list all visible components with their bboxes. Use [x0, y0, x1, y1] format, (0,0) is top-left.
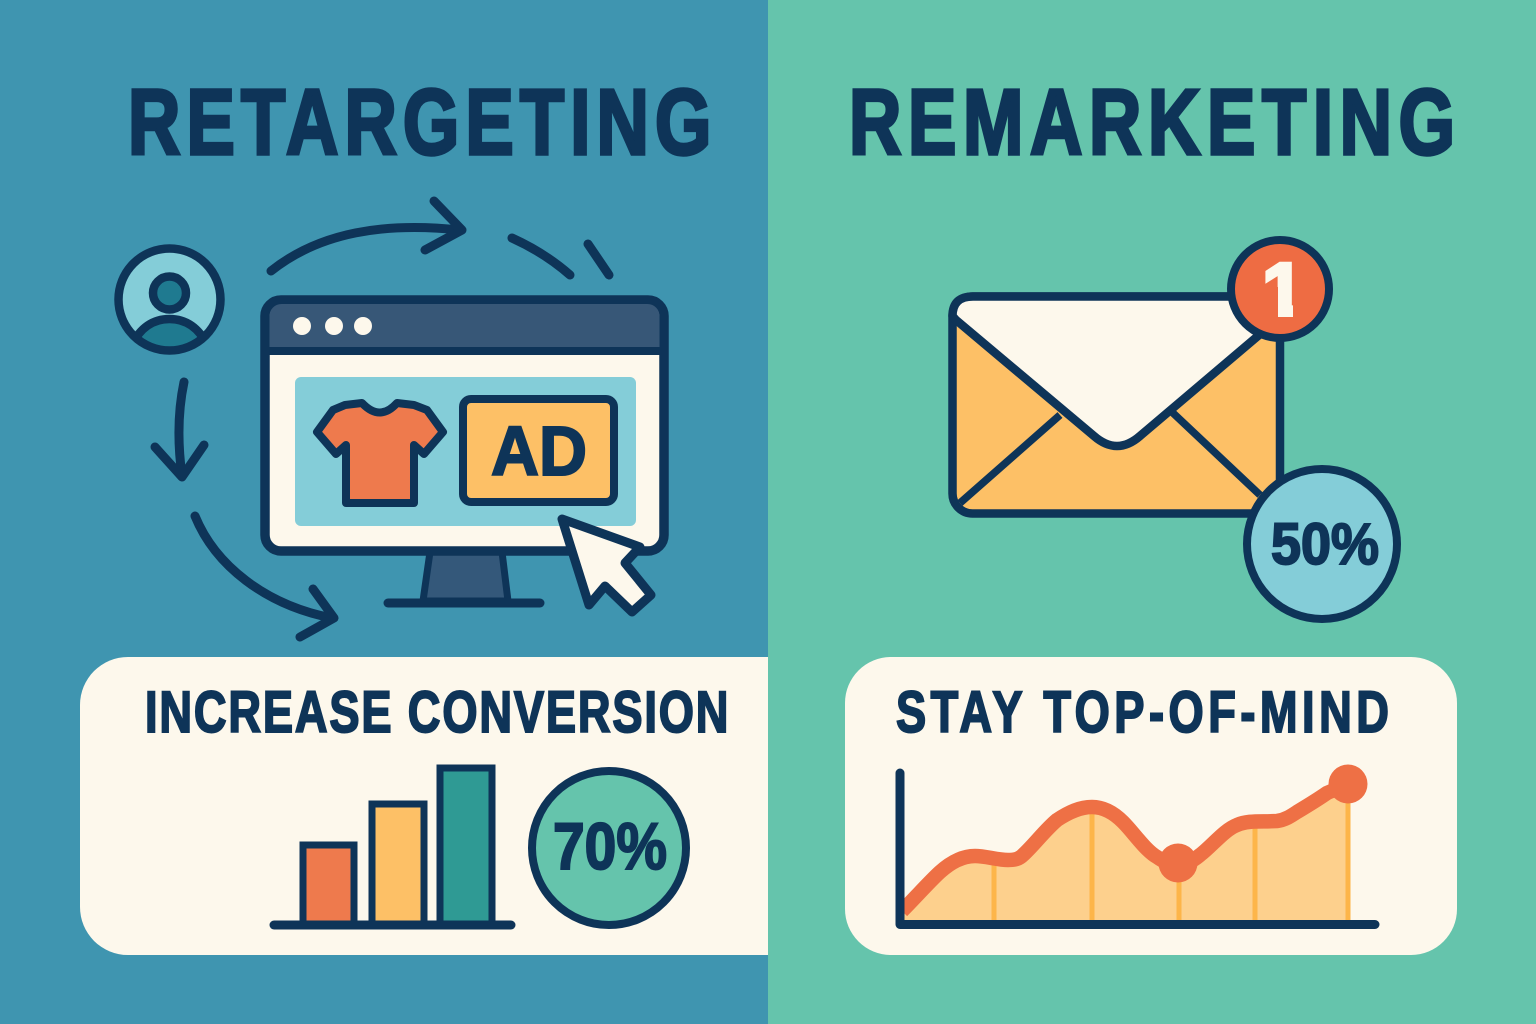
browser bar [270, 304, 660, 350]
browser dots [293, 317, 372, 335]
arrow: bottom cycle arrow [195, 516, 334, 637]
chart area [902, 784, 1348, 921]
icon: monitor with ad: AD [491, 412, 587, 490]
heading: stay top-of-mind: STAY TOP-OF-MIND [896, 681, 1389, 745]
icon: user avatar [118, 248, 220, 360]
badge: 70%: 70% [553, 809, 667, 883]
heading: increase conversion: INCREASE CONVERSION [145, 681, 728, 745]
badge: notification 1: 1 [1262, 248, 1304, 331]
envelope lower folds [960, 413, 1260, 503]
icon: t-shirt [317, 403, 443, 503]
monitor screen [265, 300, 664, 551]
icon: envelope [952, 296, 1280, 514]
panel: remarketing background [768, 0, 1536, 1024]
monitor stand [423, 552, 508, 601]
arrow: top cycle arrow [271, 201, 462, 271]
panel: increase conversion [80, 657, 768, 955]
panel: stay top-of-mind [845, 657, 1457, 955]
title: remarketing: REMARKETING [849, 70, 1455, 174]
line chart [900, 764, 1375, 924]
ad box [463, 399, 614, 502]
chart points [1158, 844, 1198, 882]
arrow: left down arrow [155, 382, 204, 477]
badge: 70% [532, 771, 686, 925]
icon: monitor with ad [265, 300, 664, 603]
icon: cursor [562, 519, 651, 612]
badge: notification 1 [1231, 240, 1329, 338]
panel: retargeting background [0, 0, 768, 1024]
arrow: dashed cycle segments [512, 238, 609, 275]
ad area [295, 377, 636, 526]
chart drop lines [994, 785, 1348, 920]
bar chart [274, 768, 511, 925]
title: retargeting: RETARGETING [128, 70, 711, 174]
badge: 50% [1247, 469, 1397, 619]
badge: 50%: 50% [1271, 512, 1379, 577]
envelope flap [952, 296, 1265, 446]
chart axes [900, 773, 1375, 924]
trend line [902, 784, 1348, 911]
